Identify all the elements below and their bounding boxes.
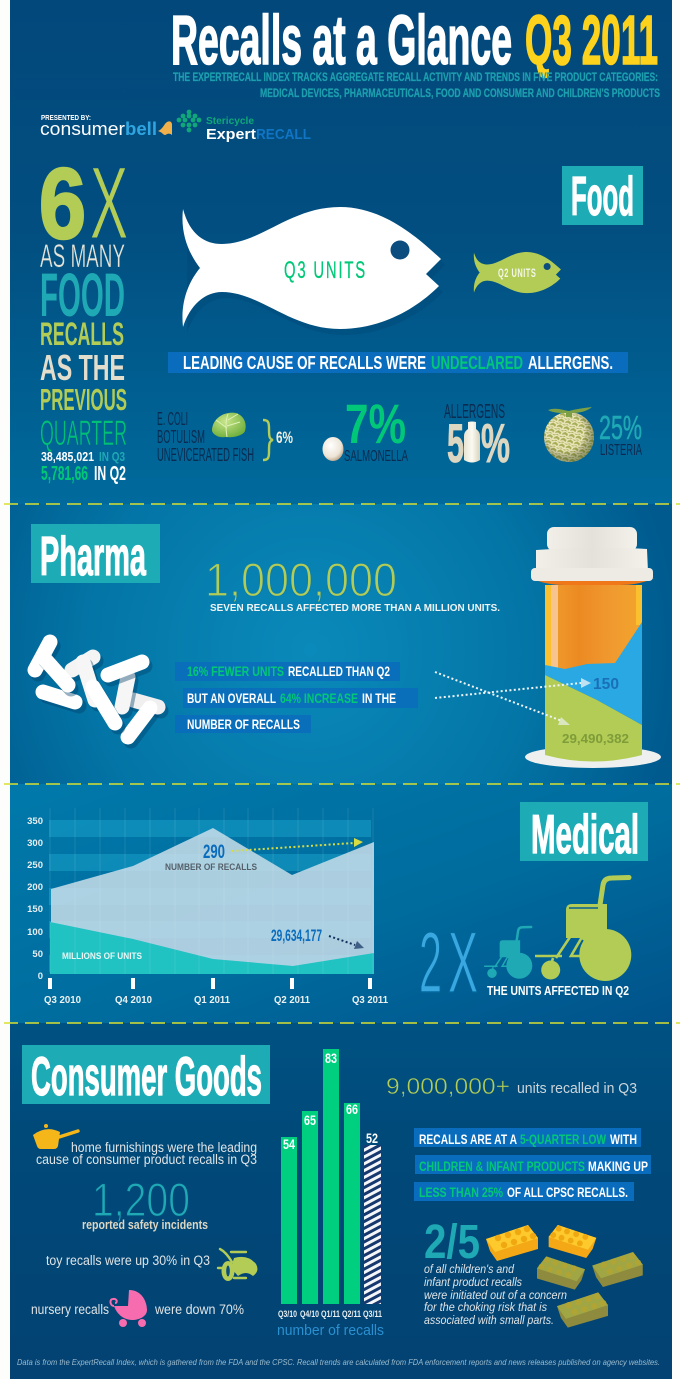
stat: 6% e coli botulism fish: BOTULISM: [157, 427, 205, 447]
pharma tag: [31, 524, 160, 587]
icon: pill bottle chart: 29,490,382: [562, 731, 629, 746]
medical: 2X callout: X: [448, 915, 478, 1011]
text: home furnishings: [36, 1140, 257, 1167]
callout: 290 number of recalls: 290: [203, 842, 225, 863]
stat: 25% listeria: LISTERIA: [600, 442, 642, 459]
stat: 2/5 choking risk: were initiated out of a concern: [424, 1288, 567, 1302]
pharma: highlighted text bars: 16% FEWER UNITS: [187, 664, 284, 679]
icon: pill bottle chart: [525, 527, 661, 768]
x axis ticks and labels: Q4 2010: [115, 995, 152, 1006]
food: 6X headline stack: IN Q3: [99, 449, 125, 464]
bar chart: number of recalls: number of recalls: [277, 1323, 384, 1339]
callout: 290 number of recalls: NUMBER OF RECALLS: [165, 862, 257, 873]
stat: 6% e coli botulism fish: 6%: [276, 428, 293, 447]
food banner: leading cause: UNDECLARED: [431, 353, 523, 373]
bar value labels: 52: [366, 1130, 378, 1146]
icon: small wheelchair: [484, 927, 532, 979]
y axis labels: 150: [27, 904, 43, 915]
bar value labels: 65: [304, 1112, 316, 1128]
pharma tag: Pharma: [40, 525, 146, 587]
food tag: [562, 165, 643, 227]
pharma: highlighted text bars: IN THE: [362, 691, 396, 706]
stat: 6% e coli botulism fish: E. COLI: [157, 409, 188, 429]
food: 6X headline stack: QUARTER: [40, 414, 127, 453]
consumer: highlighted text bars: LESS THAN 25%: [419, 1185, 503, 1200]
callout: 290 number of recalls: [165, 838, 363, 873]
stat: 51% allergens: 5: [447, 412, 464, 474]
pharma: 1,000,000 callout: SEVEN RECALLS AFFECTED MORE THAN A MILLION UNITS.: [210, 603, 500, 614]
stat: 6% e coli botulism fish: UNEVICERATED FISH: [157, 445, 254, 465]
subtitle: [173, 72, 660, 100]
consumer: highlighted text bars: WITH: [610, 1132, 637, 1147]
text: nursery recalls: were down 70%: [154, 1302, 244, 1317]
logos: presented by: consumer: [40, 119, 125, 139]
x axis ticks and labels: Q1 2011: [194, 995, 230, 1006]
bars: [281, 1049, 360, 1304]
consumer: highlighted text bars: CHILDREN & INFANT PRODUCTS: [419, 1159, 585, 1174]
chart bands: [49, 820, 371, 972]
small fish: Q2 units: Q2 UNITS: [498, 267, 536, 281]
consumer: highlighted text bars: [414, 1128, 651, 1201]
consumer goods tag: Consumer Goods: [31, 1045, 262, 1107]
pharma: highlighted text bars: 64% INCREASE: [280, 691, 358, 706]
x axis ticks and labels: [44, 978, 388, 1006]
food: 6X headline stack: IN Q2: [94, 463, 126, 485]
bar axis labels: Q3/11: [363, 1309, 383, 1320]
small fish: Q2 units: [474, 252, 561, 293]
bar axis labels: [278, 1309, 383, 1320]
stat: 9,000,000+ units recalled: [386, 1073, 637, 1099]
x axis ticks and labels: Q2 2011: [274, 995, 310, 1006]
big fish: Q3 units: Q3 UNITS: [284, 258, 365, 284]
stat: 2/5 choking risk: infant product recalls: [424, 1275, 522, 1289]
text: home furnishings: cause of consumer product recalls in Q3: [36, 1152, 257, 1167]
consumer: highlighted text bars: 5-QUARTER LOW: [520, 1132, 606, 1147]
stat: 2/5 choking risk: for the choking risk that is: [424, 1300, 547, 1314]
bar axis labels: Q1/11: [321, 1309, 341, 1320]
icon: lego bricks: [486, 1225, 643, 1328]
pharma: highlighted text bars: NUMBER OF RECALLS: [187, 717, 300, 732]
bar value labels: [283, 1050, 378, 1152]
x axis ticks and labels: Q3 2011: [352, 995, 388, 1006]
food banner: leading cause: ALLERGENS.: [528, 353, 613, 373]
text: nursery recalls: nursery recalls: [31, 1302, 109, 1317]
bar value labels: 54: [283, 1136, 295, 1152]
text: FOOD: [40, 261, 125, 329]
bar: Q3/11 striped: [364, 1145, 381, 1304]
stat: 7% salmonella: 7%: [345, 392, 406, 455]
stat: 7% salmonella: [322, 392, 408, 465]
y axis labels: 250: [27, 860, 43, 871]
icon: stroller: [110, 1290, 147, 1327]
y axis labels: 0: [38, 971, 43, 982]
arrows: pharma dotted pointers: [435, 672, 591, 725]
medical: 2X callout: [419, 915, 629, 1011]
stat: 9,000,000+ units recalled: units recalled in Q3: [517, 1080, 637, 1097]
stat: 2/5 choking risk: [424, 1216, 567, 1327]
icon: large wheelchair: [535, 878, 631, 981]
text: nursery recalls: [31, 1302, 244, 1317]
x axis ticks and labels: Q3 2010: [44, 995, 81, 1006]
food: 6X headline stack: X: [90, 146, 128, 260]
food: 6X headline stack: PREVIOUS: [40, 382, 127, 417]
bar axis labels: Q4/10: [300, 1309, 319, 1320]
logos: presented by: PRESENTED BY:: [41, 113, 91, 122]
y axis labels: 350: [27, 816, 43, 827]
area: millions of units: [50, 922, 374, 974]
stat: 25% listeria: [544, 407, 642, 462]
logos: presented by: Expert: [206, 126, 256, 143]
y axis labels: 200: [27, 882, 43, 893]
y axis labels: 300: [27, 838, 43, 849]
logos: presented by: bell: [125, 119, 157, 139]
stat: 6% e coli botulism fish: [157, 409, 293, 465]
consumer goods tag: [22, 1045, 270, 1107]
bar axis labels: Q3/10: [278, 1309, 297, 1320]
y axis labels: 50: [32, 949, 43, 960]
logos: presented by: [40, 110, 311, 143]
consumer: highlighted text bars: OF ALL CPSC RECALLS.: [507, 1185, 628, 1200]
logos: presented by: RECALL: [256, 126, 311, 143]
stat: 1,200 safety incidents: reported safety incidents: [82, 1218, 208, 1232]
y axis labels: [27, 816, 43, 982]
bar value labels: 66: [346, 1101, 358, 1117]
stat: 2/5 choking risk: associated with small parts.: [424, 1313, 554, 1327]
stat: 25% listeria: 25%: [599, 409, 642, 446]
food: 6X headline stack: [39, 146, 128, 485]
medical: 2X callout: 2: [419, 915, 442, 1011]
pharma: highlighted text bars: RECALLED THAN Q2: [288, 664, 390, 679]
food: 6X headline stack: RECALLS: [40, 316, 124, 352]
big fish: Q3 units: [182, 207, 445, 335]
stat: 9,000,000+ units recalled: 9,000,000+: [386, 1073, 510, 1099]
stat: 51% allergens: ALLERGENS: [444, 401, 505, 423]
stat: 1,200 safety incidents: 1,200: [92, 1173, 190, 1226]
food: 6X headline stack: 38,485,021: [41, 449, 94, 464]
medical area chart: [27, 808, 388, 1006]
text: toy recalls: toy recalls were up 30% in Q3: [46, 1253, 210, 1268]
bar chart: number of recalls: [277, 1049, 384, 1339]
food: 6X headline stack: AS THE: [40, 347, 125, 388]
food banner: leading cause: LEADING CAUSE OF RECALLS WERE: [183, 353, 426, 373]
text: home furnishings: home furnishings were the leading: [71, 1140, 257, 1155]
y axis labels: 100: [27, 927, 43, 938]
consumer: highlighted text bars: RECALLS ARE AT A: [419, 1132, 517, 1147]
stat: 51% allergens: [444, 401, 510, 474]
stat: 51% allergens: %: [481, 412, 510, 474]
callout: 29,634,177: 29,634,177: [271, 926, 322, 945]
bar value labels: 83: [325, 1050, 337, 1066]
icon: pill bottle chart: 150: [593, 676, 619, 693]
icon: pills: [35, 642, 161, 741]
pharma: 1,000,000 callout: 1,000,000: [205, 553, 397, 606]
food: 6X headline stack: 6: [39, 148, 86, 260]
consumer: highlighted text bars: MAKING UP: [588, 1159, 648, 1174]
bar axis labels: Q2/11: [342, 1309, 362, 1320]
logos: presented by: Stericycle: [206, 116, 254, 127]
food: 6X headline stack: 5,781,66: [41, 463, 88, 485]
icon: saucepan: [33, 1124, 78, 1149]
stat: 2/5 choking risk: of all children's and: [424, 1262, 514, 1276]
medical: 2X callout: THE UNITS AFFECTED IN Q2: [487, 983, 629, 998]
stat: 2/5 choking risk: 2/5: [424, 1216, 480, 1269]
area: number of recalls: [51, 828, 374, 974]
stat: 7% salmonella: SALMONELLA: [344, 448, 408, 465]
label: millions of units: MILLIONS OF UNITS: [62, 951, 142, 962]
food banner: leading cause: [168, 352, 628, 373]
pharma: highlighted text bars: [175, 662, 418, 733]
pharma: highlighted text bars: BUT AN OVERALL: [187, 691, 276, 706]
icon: tricycle: [218, 1249, 257, 1281]
food: 6X headline stack: AS MANY: [40, 238, 125, 274]
pharma: 1,000,000 callout: [205, 553, 500, 614]
